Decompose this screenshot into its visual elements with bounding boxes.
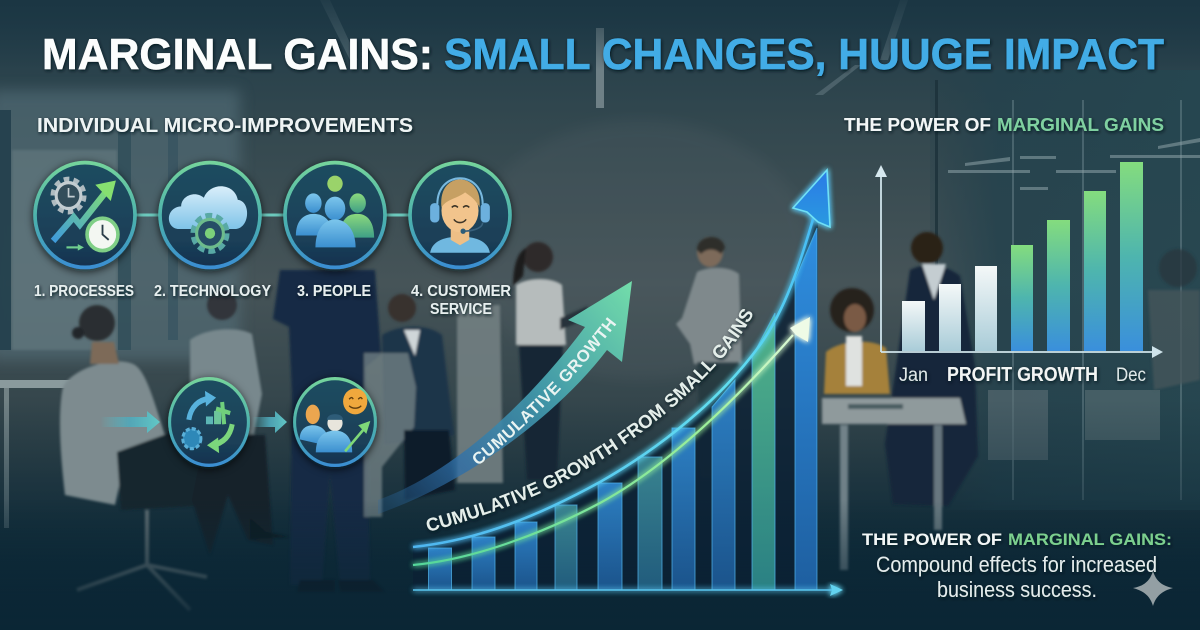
right glass wall: [930, 70, 1200, 510]
heading: the power of marginal gains: MARGINAL GAINS: [997, 115, 1164, 135]
text block: takeaway: MARGINAL GAINS:: [1008, 531, 1172, 549]
office people: [60, 232, 1200, 610]
heading: the power of marginal gains: [844, 115, 1164, 135]
woman rear light pants: [457, 305, 503, 483]
title: SMALL CHANGES, HUUGE IMPACT: [444, 30, 1164, 79]
icon: people: [285, 163, 385, 267]
title: MARGINAL GAINS:: [42, 30, 433, 79]
arrow: to people icon: [252, 411, 287, 433]
seated man navy suit: [364, 294, 455, 517]
chart: profit growth: [875, 162, 1163, 386]
icon: customer satisfaction outcome: [295, 379, 375, 465]
bars: [902, 162, 1143, 351]
labels: improvement areas: 3. PEOPLE: [297, 283, 371, 300]
bars: [428, 228, 817, 590]
arrow: into cycle icon: [100, 411, 160, 433]
icon: sparkle star: [1133, 571, 1173, 606]
icon: technology: [160, 163, 260, 267]
seated woman and chair: [60, 305, 217, 610]
label: cumulative growth from small gains: CUMULATIVE GROWTH FROM SMALL GAINS: [426, 309, 755, 534]
text block: takeaway: THE POWER OF: [862, 531, 1002, 549]
icon: customer service: [410, 163, 510, 267]
labels: improvement areas: 4. CUSTOMER: [411, 283, 511, 300]
heading: individual micro-improvements: INDIVIDUAL MICRO-IMPROVEMENTS: [37, 114, 413, 137]
chart: cumulative growth bars: [409, 166, 846, 598]
man standing: [676, 237, 742, 477]
seated woman two: [190, 290, 290, 555]
woman with ponytail: [513, 242, 588, 480]
labels: improvement areas: 1. PROCESSES: [34, 283, 134, 300]
chart dark backdrop: [413, 210, 818, 590]
back wall glow: [470, 120, 810, 380]
desk at right: [822, 398, 966, 570]
green growth curve: [413, 317, 810, 565]
blue growth curve with arrowhead: [413, 170, 830, 547]
arrow: cumulative growth ribbon: [378, 281, 632, 514]
labels: improvement areas: [34, 283, 511, 318]
heading: the power of marginal gains: THE POWER OF: [844, 115, 991, 135]
text block: takeaway: [862, 531, 1172, 602]
text block: takeaway: business success.: [937, 577, 1097, 602]
text block: takeaway: Compound effects for increased: [876, 552, 1157, 577]
labels: improvement areas: SERVICE: [430, 301, 492, 318]
floor shading: [0, 400, 1200, 630]
connector between improvement circles: [130, 214, 415, 216]
far right woman: [1148, 249, 1200, 390]
title: [42, 30, 1164, 79]
woman at right desk: [824, 288, 890, 394]
icon: continuous improvement cycle: [170, 379, 248, 465]
baseline axis: [413, 584, 843, 596]
axes: [875, 165, 1163, 358]
standing man back: [273, 270, 385, 592]
labels: improvement areas: 2. TECHNOLOGY: [154, 283, 271, 300]
icon: processes: [35, 163, 135, 267]
left wall and windows: [0, 90, 240, 528]
man in suit at right: [885, 232, 978, 506]
arrow: cumulative growth ribbon: CUMULATIVE GROWTH: [473, 317, 616, 464]
axis labels: Jan: [899, 365, 928, 386]
axis labels: Dec: [1116, 365, 1146, 386]
axis labels: PROFIT GROWTH: [947, 363, 1098, 386]
bottom darkening: [0, 500, 1200, 630]
ceiling lights: [320, 0, 908, 108]
